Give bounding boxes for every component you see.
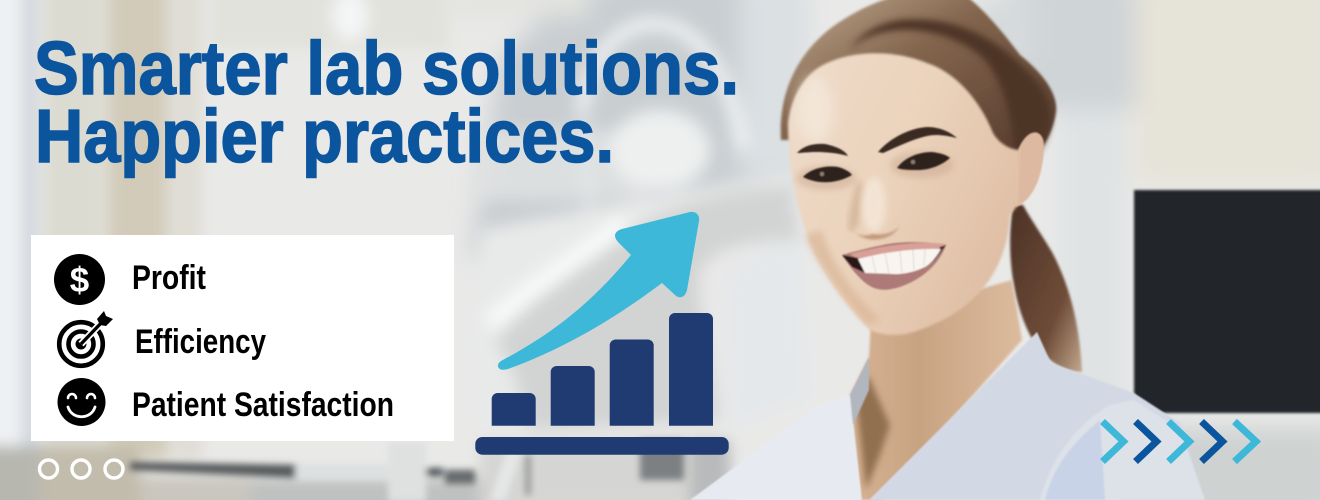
neck bbox=[850, 280, 1022, 500]
hair bbox=[781, 0, 1056, 165]
icon: dollar coin bbox=[54, 254, 105, 305]
arrow: growth bbox=[498, 212, 699, 370]
label: efficiency: Efficiency bbox=[135, 323, 266, 361]
panel: benefits list bbox=[31, 235, 454, 441]
label: patient satisfaction: Patient Satisfaction bbox=[132, 386, 394, 424]
bars bbox=[475, 313, 729, 455]
eyebrows bbox=[797, 127, 957, 156]
hair shadow bbox=[850, 19, 1050, 160]
icon: smiley face bbox=[58, 378, 106, 426]
forehead highlight bbox=[797, 76, 833, 144]
woman in scrubs bbox=[690, 0, 1205, 500]
label: profit: Profit bbox=[132, 259, 206, 297]
face bbox=[788, 53, 1020, 335]
heading: Happier practices. bbox=[35, 94, 614, 178]
face shading bbox=[805, 230, 880, 325]
heading bbox=[34, 26, 739, 178]
chevron arrows bbox=[1102, 422, 1256, 462]
icon: target with arrow bbox=[59, 311, 113, 366]
neck shadow bbox=[856, 375, 890, 490]
carousel dots bbox=[40, 460, 123, 478]
bar chart with growth arrow bbox=[475, 212, 729, 455]
heading: Smarter lab solutions. bbox=[34, 26, 739, 110]
ponytail bbox=[1010, 205, 1082, 372]
nose bbox=[849, 177, 899, 240]
eyes bbox=[796, 152, 954, 190]
scrub top bbox=[690, 332, 1205, 500]
ear bbox=[1016, 132, 1044, 207]
icon: dollar coin: $ bbox=[70, 261, 89, 300]
monitor bbox=[1134, 190, 1320, 413]
smile bbox=[842, 242, 946, 290]
